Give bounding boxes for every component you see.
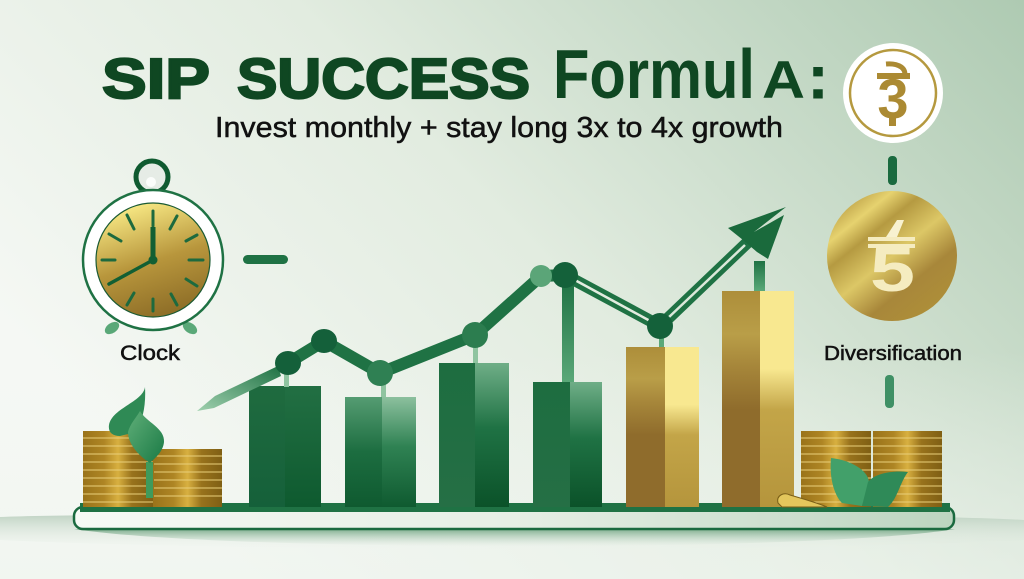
dash: diversification connector — [885, 375, 894, 408]
icon: left leaves — [109, 387, 164, 498]
icon: gold coin: 5 — [870, 236, 915, 305]
shelf — [0, 503, 1024, 549]
title: : — [808, 44, 828, 111]
bar 4 — [533, 382, 602, 507]
growth arrow line — [197, 207, 786, 411]
icon: loose gold coin — [778, 494, 827, 507]
bar 6 — [722, 291, 794, 507]
icon: gold coin — [827, 191, 957, 321]
dash: clock connector — [243, 255, 288, 264]
title: SUCCESS — [237, 47, 530, 111]
icon: clock — [83, 161, 223, 337]
bar 5 — [626, 347, 699, 507]
clock label: Clock — [120, 342, 181, 365]
icon: rupee medallion — [843, 43, 943, 143]
dash: medallion connector — [888, 156, 897, 185]
title: A — [762, 51, 805, 110]
diversification label: Diversification — [824, 343, 962, 365]
icon: rupee medallion: 3 — [877, 67, 909, 130]
icon: right coin stacks — [801, 431, 942, 507]
bar 3 — [439, 363, 509, 507]
bar chart — [249, 291, 794, 507]
coin stack: left — [83, 431, 222, 507]
title — [102, 35, 828, 113]
title: SIP — [102, 47, 210, 111]
bar 1 — [249, 386, 321, 507]
icon: right leaves — [831, 458, 908, 507]
title: Formul — [553, 35, 755, 113]
subtitle: Invest monthly + stay long 3x to 4x growth — [215, 112, 783, 144]
bar 2 — [345, 397, 416, 507]
